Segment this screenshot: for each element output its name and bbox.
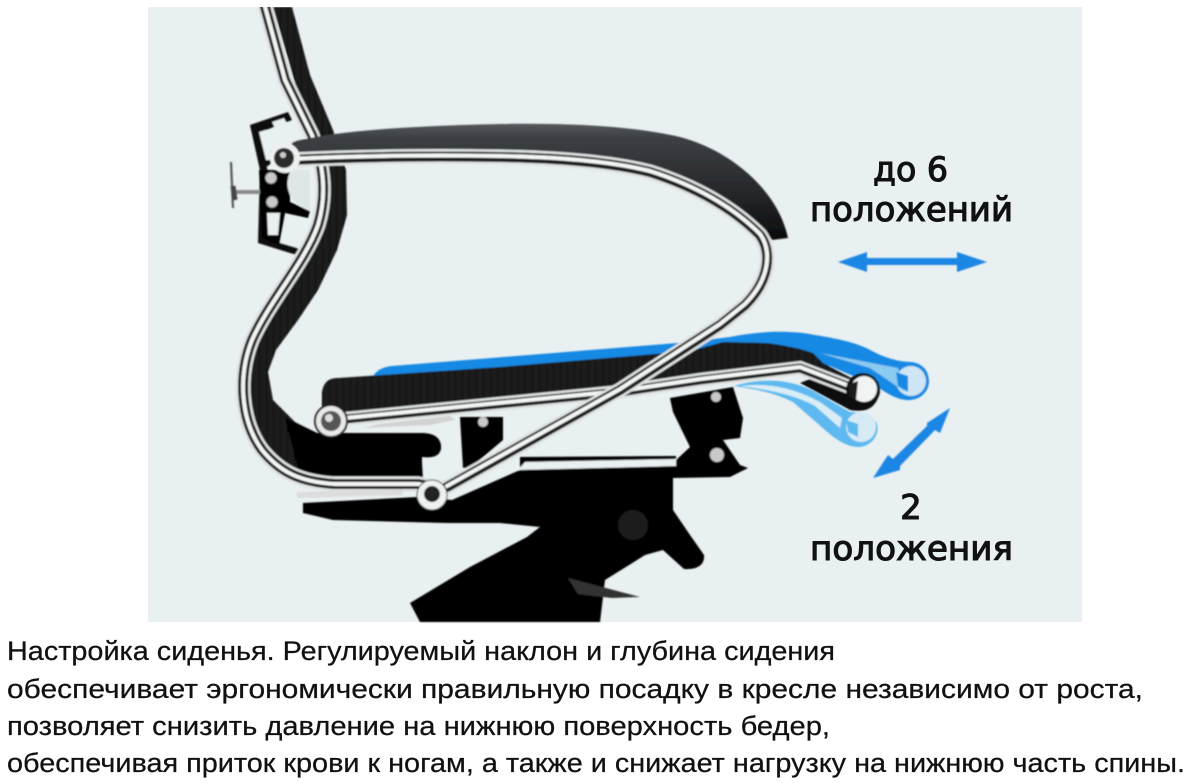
photo panel background (148, 7, 1082, 622)
caption text (7, 636, 1185, 778)
mechanism under the seat (303, 387, 748, 622)
caption text: позволяет снизить давление на нижнюю поверхность бедер, (7, 711, 830, 741)
chrome seat rail (335, 367, 852, 420)
top margin mask (148, 0, 1082, 7)
seat rail front ball (846, 373, 880, 407)
arrow: horizontal double arrow (838, 252, 987, 272)
blue raised seat position (372, 332, 929, 400)
base tilt flap (568, 578, 640, 598)
headrest bracket (231, 112, 310, 257)
backrest mesh (245, 7, 423, 478)
seat rail rear ball (315, 405, 347, 437)
arm pad (291, 124, 788, 240)
label: 2 positions (810, 488, 1013, 569)
caption text: обеспечивая приток крови к ногам, а также и снижает нагрузку на нижнюю часть спины. (7, 748, 1185, 778)
caption text: обеспечивает эргономически правильную посадку в кресле независимо от роста, (7, 674, 1143, 704)
arm frame ball joint (270, 143, 300, 173)
caption text: Настройка сиденья. Регулируемый наклон и глубина сидения (7, 636, 835, 666)
label: up to 6 positions (810, 150, 1013, 230)
blue lowered seat position (734, 381, 878, 447)
silver rail under the seat (518, 459, 676, 470)
label: 2 positions: 2 (900, 488, 922, 528)
seat cushion (322, 342, 880, 415)
label: 2 positions: положения (810, 529, 1013, 569)
chrome arm frame (290, 156, 767, 487)
label: up to 6 positions: положений (810, 190, 1013, 230)
chair illustration (231, 3, 929, 622)
chrome back frame (243, 3, 440, 488)
black under-seat cushion (285, 418, 441, 478)
label: up to 6 positions: до 6 (873, 150, 948, 190)
lower ball joint (417, 480, 447, 510)
arrow: diagonal double arrow (873, 408, 950, 478)
